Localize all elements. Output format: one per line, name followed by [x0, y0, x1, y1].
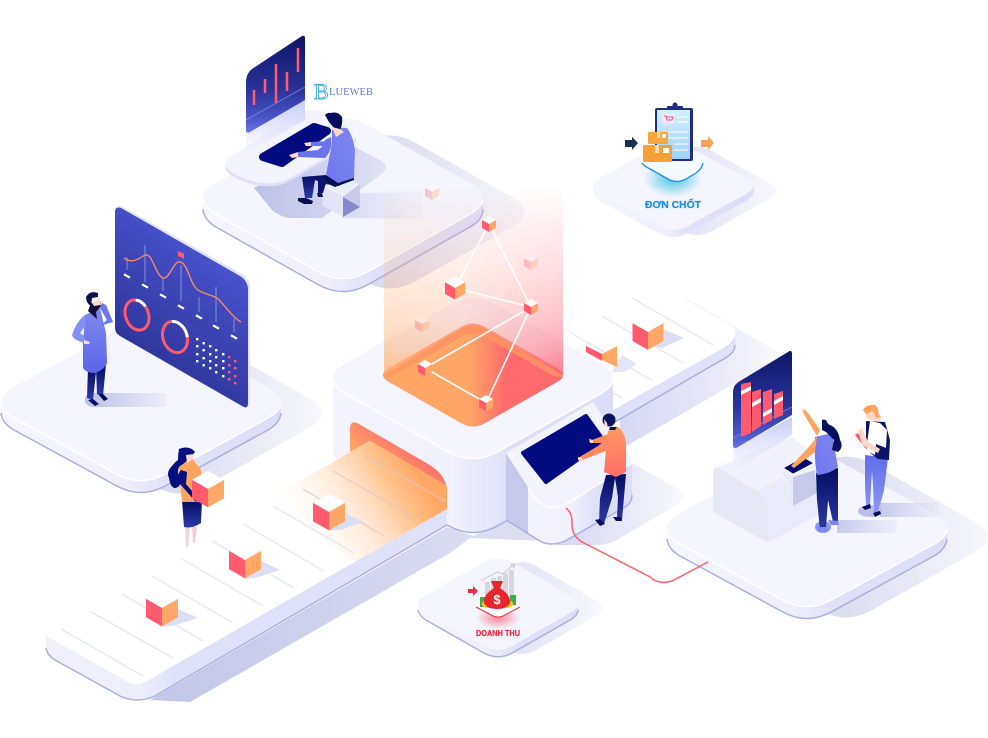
label: revenue: DOANH THU	[476, 628, 520, 638]
monitor glow	[246, 100, 305, 153]
chart guide lines	[127, 245, 234, 332]
pink glow	[476, 607, 520, 629]
control kiosk	[506, 402, 632, 544]
orange light on belt	[270, 441, 447, 562]
box on belt	[229, 542, 261, 578]
faded node	[425, 184, 439, 200]
woman carrying box	[168, 448, 224, 547]
panel: order closing platform	[592, 102, 776, 237]
man with clipboard	[855, 405, 890, 517]
woman pointing at monitor	[791, 408, 842, 532]
label: order closing: ĐƠN CHỐT	[645, 197, 702, 211]
icon: cash and coins	[480, 595, 516, 608]
icon base chevron	[640, 156, 704, 182]
shadow: left platform	[38, 332, 322, 494]
box emerging from machine	[586, 346, 617, 367]
monitor with candlestick bars	[246, 36, 305, 133]
panel: central processing machine	[333, 298, 613, 532]
node	[482, 216, 496, 232]
shadow: top platform	[255, 136, 525, 288]
kiosk shadow	[555, 462, 684, 545]
box on belt	[632, 314, 664, 350]
logo: BlueWeb: B	[314, 79, 329, 104]
box shadow	[648, 328, 684, 348]
icon: parcels	[643, 132, 672, 162]
shadow: machine and lower conveyor	[150, 521, 545, 702]
stool shadow	[343, 193, 421, 218]
data beam	[384, 205, 563, 375]
node	[445, 277, 465, 300]
donut chart one	[121, 297, 153, 333]
panel: lower conveyor belt	[46, 441, 447, 700]
icon: stool	[323, 175, 360, 217]
red pit	[383, 324, 563, 426]
desk block	[713, 437, 817, 543]
icon: revenue chart	[481, 563, 516, 600]
tunnel back wall	[350, 422, 447, 492]
person shadows	[815, 503, 938, 533]
line chart	[124, 255, 241, 322]
bar chart monitor	[733, 351, 792, 448]
shadow: upper conveyor	[620, 297, 778, 445]
faded node	[524, 254, 538, 270]
man operating kiosk	[578, 414, 626, 526]
person seated at desk	[289, 112, 355, 204]
panel: right team platform	[667, 351, 947, 618]
desk shadow	[254, 143, 386, 218]
panel: revenue platform	[418, 558, 602, 657]
panel: left analytics platform	[1, 206, 281, 492]
icon: clipboard	[655, 102, 693, 161]
arrow: outgoing	[701, 136, 714, 150]
logo: BlueWeb	[314, 79, 373, 104]
cyan glow	[644, 161, 702, 197]
icon base chevron	[476, 604, 520, 617]
shadow: right platform	[704, 456, 988, 618]
panel: top workstation platform	[203, 36, 483, 292]
node	[479, 395, 493, 411]
panel: upper conveyor belt	[560, 290, 736, 423]
calendar dot grid	[196, 338, 236, 384]
wire	[566, 508, 708, 582]
bearded man in coat	[72, 292, 113, 406]
person shadow	[85, 393, 167, 407]
icon: money bag	[484, 581, 510, 609]
monitor glow	[733, 417, 792, 472]
faded node	[415, 316, 429, 332]
kiosk screen	[523, 416, 604, 482]
desk	[225, 110, 357, 186]
machine top	[333, 298, 613, 458]
node	[418, 360, 432, 376]
donut chart two	[158, 318, 192, 356]
node	[524, 299, 538, 315]
box on belt	[313, 494, 345, 530]
logo: BlueWeb: LUEWEB	[329, 87, 373, 98]
network graph of data nodes	[415, 184, 538, 411]
axis tick labels	[124, 274, 237, 339]
icon: money bag: $	[493, 592, 501, 607]
dashboard monitor	[115, 206, 250, 408]
box shadow	[612, 355, 637, 372]
arrow: revenue in	[468, 586, 478, 596]
machine body	[333, 378, 613, 532]
box on belt	[146, 590, 178, 626]
connecting lines	[425, 224, 531, 403]
arrow: incoming	[625, 137, 638, 150]
box shadows	[162, 513, 364, 627]
